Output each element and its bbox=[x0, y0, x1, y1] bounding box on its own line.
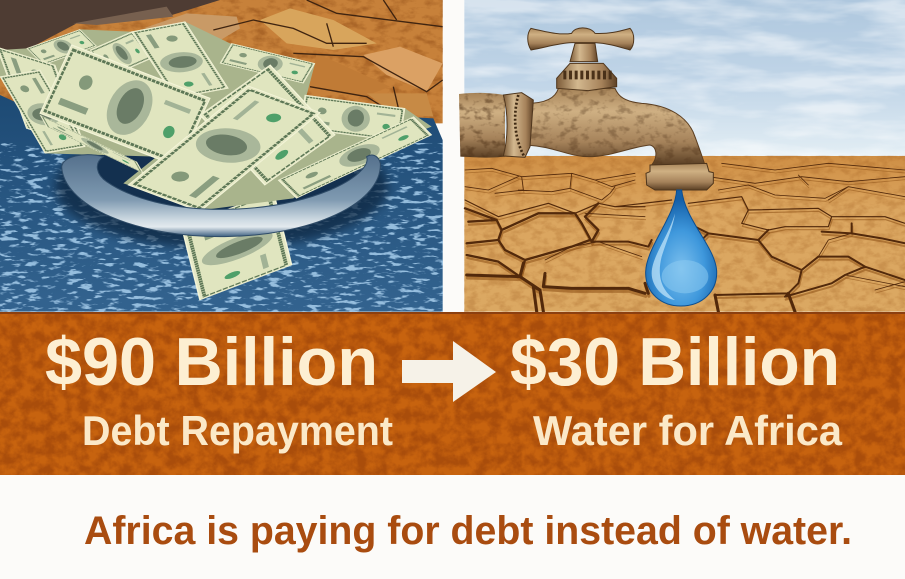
handle bbox=[528, 28, 634, 50]
ring shadow bbox=[55, 125, 388, 248]
hanging bill bbox=[182, 192, 292, 300]
drain hole bbox=[88, 130, 354, 210]
heading: $90 Billion: $90 Billion bbox=[45, 324, 378, 400]
heading: $30 Billion: $30 Billion bbox=[510, 324, 840, 400]
ground cracks bbox=[465, 163, 905, 312]
drain ring front bbox=[62, 155, 380, 237]
orange banner bbox=[0, 312, 905, 475]
drain opening bbox=[62, 150, 380, 177]
tagline: Africa is paying for debt instead of water. bbox=[84, 509, 852, 553]
wall pipe bbox=[459, 93, 505, 158]
label: Water for Africa: Water for Africa bbox=[533, 407, 843, 454]
sky bbox=[464, 0, 905, 158]
top nut bbox=[557, 63, 617, 91]
spout nut bbox=[646, 163, 713, 190]
crack shadows bbox=[466, 166, 905, 315]
pipe collar bbox=[503, 93, 533, 157]
panel: debt drain illustration bbox=[0, 0, 443, 312]
arrow bbox=[402, 341, 496, 402]
bills pile bbox=[0, 22, 432, 212]
pile underlay bbox=[0, 22, 432, 210]
faucet body bbox=[527, 88, 705, 165]
collar ridges bbox=[515, 95, 524, 157]
faucet bbox=[459, 28, 713, 190]
icon: water drop bbox=[646, 190, 717, 306]
label: Debt Repayment: Debt Repayment bbox=[82, 407, 393, 454]
nut ridges bbox=[563, 62, 612, 88]
water bbox=[0, 95, 443, 312]
cracked earth background bbox=[0, 0, 443, 123]
body tarnish bbox=[527, 88, 705, 165]
stem bbox=[570, 43, 598, 62]
pipe texture bbox=[459, 93, 505, 158]
cracked ground bbox=[464, 156, 905, 315]
panel: faucet in desert illustration bbox=[459, 0, 905, 315]
